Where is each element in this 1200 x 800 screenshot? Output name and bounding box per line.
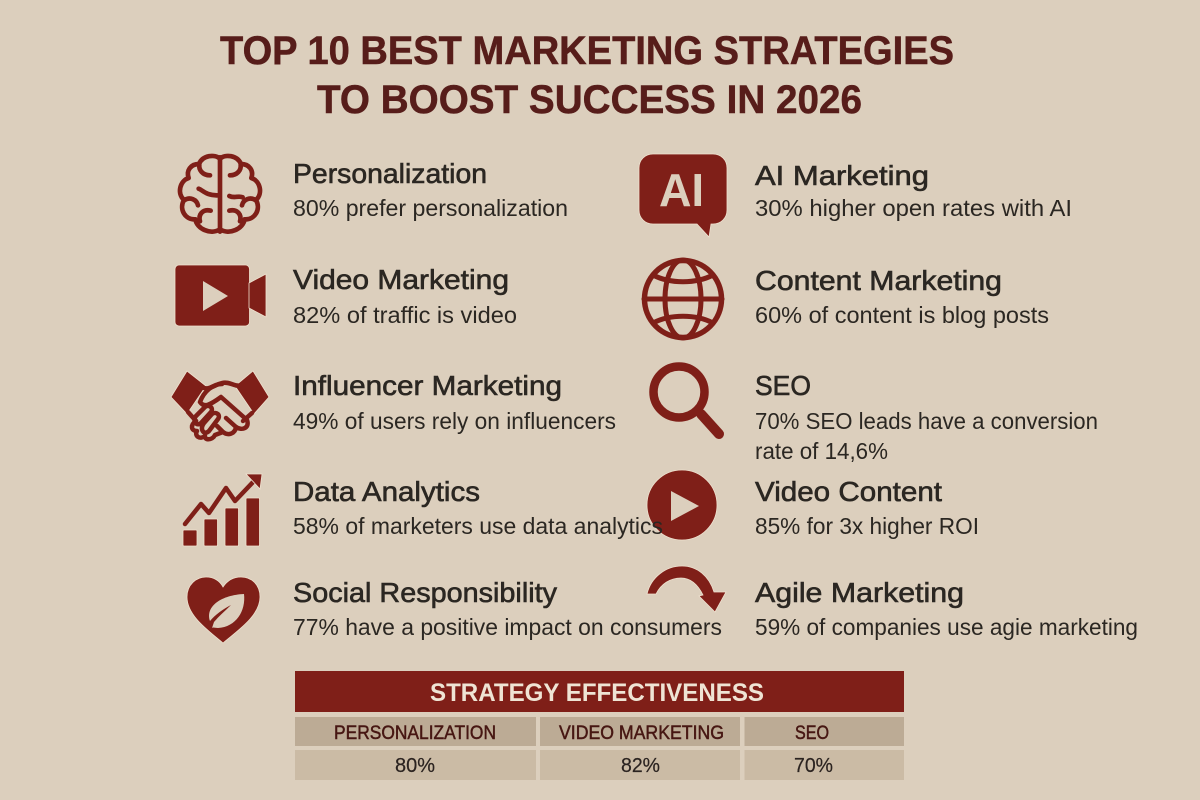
text: agile marketing (755, 577, 1138, 640)
text: personalization: 80% prefer personalization (293, 195, 568, 221)
column: personalization: PERSONALIZATION (334, 722, 496, 744)
text: social responsibility: 77% have a positive impact on consumers (293, 614, 722, 640)
text: video content: 85% for 3x higher ROI (755, 513, 979, 539)
table header: STRATEGY EFFECTIVENESS (430, 679, 764, 707)
text: video marketing (293, 264, 517, 328)
text: SEO: 70% SEO leads have a conversion (755, 408, 1098, 434)
column: video marketing: VIDEO MARKETING (559, 722, 724, 744)
table: strategy effectiveness (295, 671, 904, 780)
icon: play circle (647, 470, 717, 540)
column: personalization: 80% (395, 755, 435, 777)
table header (295, 671, 904, 712)
text: influencer marketing (293, 370, 616, 434)
text: influencer marketing: Influencer Marketing (293, 370, 562, 401)
icon: handshake (171, 371, 269, 439)
text: video marketing: 82% of traffic is video (293, 302, 517, 328)
column: video marketing: 82% (621, 755, 660, 777)
text: SEO: rate of 14,6% (755, 438, 888, 464)
icon: globe (644, 260, 722, 338)
title: TOP 10 BEST MARKETING STRATEGIES (220, 29, 954, 73)
text: content marketing: 60% of content is blog posts (755, 302, 1049, 328)
title: TO BOOST SUCCESS IN 2026 (317, 78, 862, 122)
icon: heart with leaf (187, 577, 260, 643)
title (220, 29, 954, 122)
text: social responsibility (293, 577, 722, 640)
text: video marketing: Video Marketing (293, 264, 509, 295)
text: SEO: SEO (755, 370, 811, 401)
icon: AI speech bubble (639, 154, 727, 237)
text: personalization (293, 158, 568, 221)
icon: video camera (175, 265, 266, 326)
icon: bar chart with rising arrow (183, 474, 262, 546)
column: SEO (744, 717, 904, 780)
text: video content: Video Content (755, 476, 942, 507)
column: SEO: 70% (794, 755, 833, 777)
icon: AI speech bubble: AI (659, 164, 704, 216)
text: agile marketing: 59% of companies use agie marketing (755, 614, 1138, 640)
text: agile marketing: Agile Marketing (755, 577, 964, 608)
text: AI marketing: 30% higher open rates with AI (755, 195, 1072, 221)
column: SEO: SEO (795, 722, 829, 744)
text: social responsibility: Social Responsibility (293, 577, 557, 608)
column: personalization (295, 717, 536, 780)
text: content marketing (755, 265, 1049, 328)
icon: curved arrow (647, 566, 726, 612)
text: personalization: Personalization (293, 158, 487, 189)
text: influencer marketing: 49% of users rely on influencers (293, 408, 616, 434)
icon: brain (180, 156, 260, 232)
text: content marketing: Content Marketing (755, 265, 1002, 296)
text: AI marketing (755, 160, 1072, 221)
icon: magnifying glass (654, 366, 719, 434)
text: video content (755, 476, 979, 539)
text: AI marketing: AI Marketing (755, 160, 929, 191)
text: SEO (755, 370, 1098, 464)
text: data analytics stat: 58% of marketers use data analytics (293, 513, 663, 539)
text: data analytics: Data Analytics (293, 476, 480, 507)
column: video marketing (540, 717, 740, 780)
